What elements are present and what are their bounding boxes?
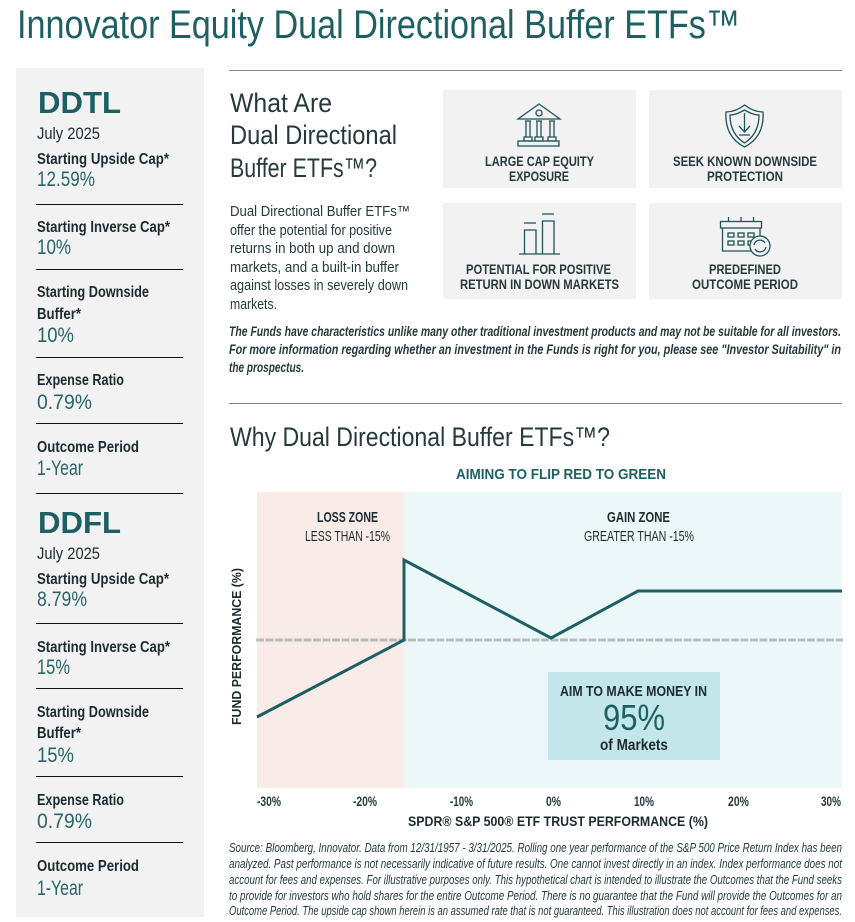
- fund block: DDTL: 10%: [37, 236, 71, 259]
- icon: bar chart: [519, 214, 560, 254]
- title: Innovator Equity Dual Directional Buffer ETFs™: [17, 3, 740, 47]
- callout: 95% of markets: 95%: [603, 697, 665, 738]
- fund block: DDFL: 1-Year: [37, 877, 83, 900]
- heading: what are dual directional buffer ETFs: [230, 88, 397, 183]
- text block: description: [230, 204, 410, 313]
- fund block: DDTL: 12.59%: [37, 168, 95, 191]
- text block: description: returns in both up and down: [230, 241, 395, 257]
- panel: seek known downside protection: SEEK KNOWN DOWNSIDE: [673, 154, 817, 169]
- text block: suitability notice: the prospectus.: [229, 360, 304, 375]
- loss zone: [257, 492, 404, 788]
- fund block: DDTL: 0.79%: [37, 391, 92, 414]
- panel: potential for positive return: [443, 203, 636, 299]
- fund block: DDFL: 0.79%: [37, 810, 92, 833]
- text block: description: against losses in severely down: [230, 278, 408, 294]
- gain zone: GAIN ZONE: [607, 509, 670, 526]
- zero line: [256, 638, 843, 642]
- x axis tick labels: -30%: [257, 793, 281, 809]
- fund block: DDTL: Starting Downside: [37, 284, 149, 301]
- text block: description: offer the potential for positive: [230, 223, 392, 239]
- panel: potential for positive return: RETURN IN DOWN MARKETS: [460, 277, 619, 292]
- fund block: DDFL: 8.79%: [37, 588, 87, 611]
- panel: predefined outcome period: OUTCOME PERIOD: [692, 277, 798, 292]
- x axis tick labels: 20%: [728, 793, 749, 809]
- gain zone: GREATER THAN -15%: [584, 528, 694, 545]
- fund block: DDTL: 1-Year: [37, 457, 83, 480]
- panel: predefined outcome period: PREDEFINED: [709, 262, 781, 277]
- panel: seek known downside protection: PROTECTION: [707, 169, 783, 184]
- fund block: DDFL: Buffer*: [37, 725, 82, 742]
- loss zone: LESS THAN -15%: [305, 528, 390, 545]
- fund block: DDTL: Expense Ratio: [37, 372, 124, 389]
- icon: calendar with refresh: [720, 217, 770, 256]
- fund block: DDFL: Starting Downside: [37, 704, 149, 721]
- fund block: DDFL: Outcome Period: [37, 858, 139, 875]
- loss zone: LOSS ZONE: [317, 509, 378, 526]
- icon: shield with down arrow: [726, 105, 763, 147]
- gain zone: [404, 492, 842, 788]
- text block: description: markets.: [230, 297, 277, 313]
- panel: potential for positive return: POTENTIAL FOR POSITIVE: [466, 262, 611, 277]
- fund block: DDTL: Starting Inverse Cap*: [37, 219, 171, 236]
- fund block: DDFL: 15%: [37, 656, 70, 679]
- payoff line: [257, 560, 842, 717]
- text block: description: markets, and a built-in buffer: [230, 260, 399, 276]
- x axis tick labels: [257, 793, 841, 809]
- fund block: DDTL: [36, 85, 183, 494]
- icon: bank building: [518, 104, 560, 146]
- heading: why dual directional buffer ETFs: Why Dual Directional Buffer ETFs™?: [230, 422, 610, 452]
- panel: seek known downside protection: [649, 90, 842, 188]
- x axis tick labels: 0%: [546, 793, 561, 809]
- callout: 95% of markets: of Markets: [600, 737, 668, 754]
- fund block: DDTL: Starting Upside Cap*: [37, 151, 170, 168]
- panel: fund sidebar: [16, 68, 204, 917]
- fund block: DDTL: July 2025: [37, 124, 100, 143]
- chart heading: AIMING TO FLIP RED TO GREEN: [456, 466, 666, 483]
- fund block: DDFL: July 2025: [37, 544, 100, 563]
- text block: description: Dual Directional Buffer ETFs™: [230, 204, 410, 220]
- fund block: DDTL: DDTL: [38, 85, 121, 120]
- fund block: DDTL: 10%: [37, 324, 74, 347]
- fund block: DDFL: 15%: [37, 744, 74, 767]
- heading: what are dual directional buffer ETFs: Buffer ETFs™?: [230, 153, 377, 183]
- fund block: DDFL: Expense Ratio: [37, 792, 124, 809]
- fund block: DDFL: Starting Upside Cap*: [37, 571, 170, 588]
- x axis tick labels: 30%: [821, 793, 841, 809]
- panel: large cap equity exposure: EXPOSURE: [509, 169, 569, 184]
- y axis title: FUND PERFORMANCE (%): [229, 568, 244, 725]
- fund block: DDFL: DDFL: [38, 505, 121, 540]
- panel: large cap equity exposure: [443, 90, 636, 188]
- panel: predefined outcome period: [649, 203, 842, 299]
- x axis tick labels: -20%: [353, 793, 377, 809]
- x axis tick labels: -10%: [450, 793, 473, 809]
- fund block: DDFL: [36, 505, 183, 900]
- panel: large cap equity exposure: LARGE CAP EQUITY: [485, 154, 594, 169]
- callout: 95% of markets: AIM TO MAKE MONEY IN: [560, 684, 707, 700]
- heading: what are dual directional buffer ETFs: What Are: [230, 88, 332, 118]
- fund block: DDTL: Outcome Period: [37, 439, 139, 456]
- x axis title: SPDR® S&P 500® ETF TRUST PERFORMANCE (%): [408, 813, 708, 829]
- fund block: DDFL: Starting Inverse Cap*: [37, 639, 171, 656]
- callout: 95% of markets: [548, 672, 720, 760]
- text block: source and disclosures: [229, 840, 843, 918]
- fund block: DDTL: Buffer*: [37, 306, 82, 323]
- heading: what are dual directional buffer ETFs: Dual Directional: [230, 120, 397, 150]
- chart: fund performance payoff: [229, 492, 843, 829]
- text block: suitability notice: [229, 324, 841, 375]
- x axis tick labels: 10%: [634, 793, 654, 809]
